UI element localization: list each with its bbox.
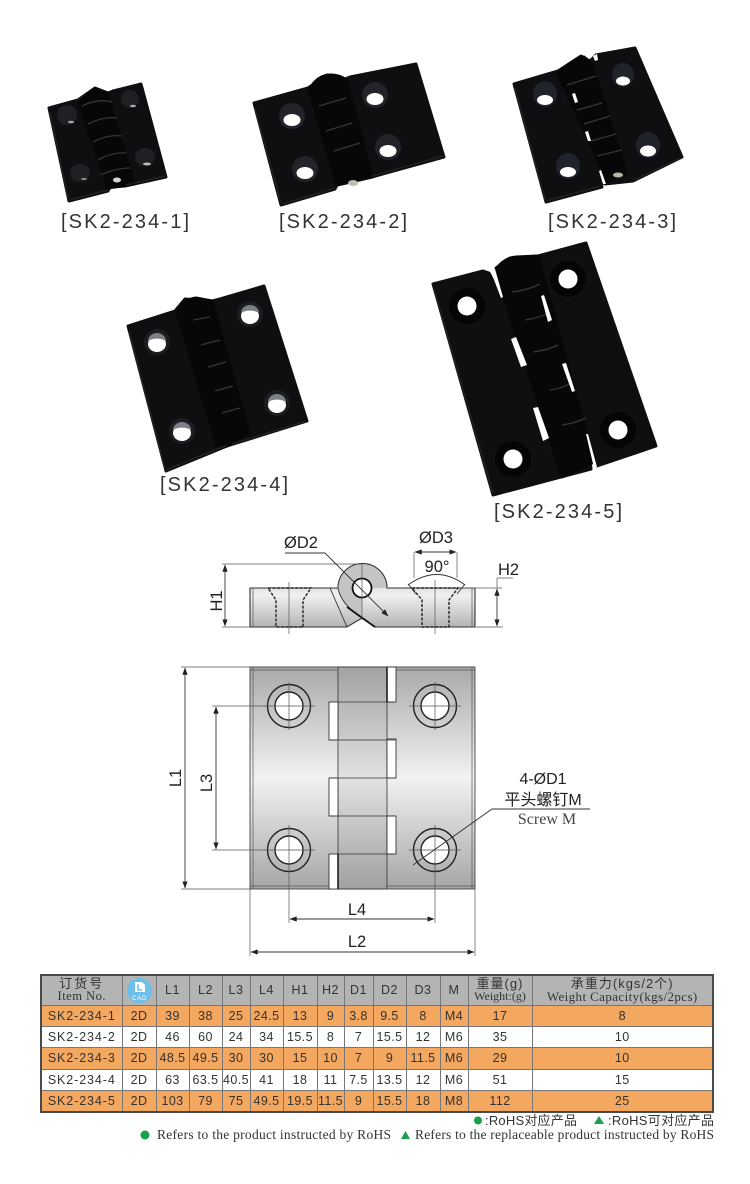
dimension: diameter D2: ØD2 xyxy=(284,534,318,552)
row: SK2-234-1: 39 xyxy=(165,1009,180,1023)
row: SK2-234-1: 9 xyxy=(327,1009,334,1023)
row: SK2-234-2: 7 xyxy=(355,1030,362,1044)
footer note: RoHS legend Chinese xyxy=(474,1113,714,1128)
callout: screw M xyxy=(413,771,590,865)
row: SK2-234-1: 9.5 xyxy=(380,1009,399,1023)
specification table xyxy=(40,974,714,1113)
product photo: SK2-234-4 xyxy=(128,286,307,471)
row: SK2-234-5: 18 xyxy=(416,1094,430,1108)
product photo: SK2-234-3 xyxy=(514,48,682,202)
label: SK2-234-1: [SK2-234-1] xyxy=(61,211,189,233)
table header row: 重量(g) xyxy=(477,976,523,991)
callout: screw M: 4-ØD1 xyxy=(519,771,567,788)
dimension: L3: L3 xyxy=(198,774,216,792)
row: SK2-234-4: 2D xyxy=(131,1073,147,1087)
row: SK2-234-1: 38 xyxy=(198,1009,213,1023)
row: SK2-234-5: 75 xyxy=(229,1094,243,1108)
row: SK2-234-5: 79 xyxy=(198,1094,213,1108)
row: SK2-234-1: 17 xyxy=(493,1009,507,1023)
top view technical drawing xyxy=(167,667,590,956)
row: SK2-234-5: SK2-234-5 xyxy=(48,1094,116,1108)
table header row: L4 xyxy=(259,983,274,997)
row: SK2-234-4 xyxy=(41,1069,713,1091)
row: SK2-234-3: 48.5 xyxy=(160,1051,185,1065)
dimension: 90 degree countersink xyxy=(408,558,465,594)
row: SK2-234-2: 15.5 xyxy=(287,1030,313,1044)
row: SK2-234-3: 29 xyxy=(493,1051,507,1065)
row: SK2-234-4: 18 xyxy=(293,1073,307,1087)
row: SK2-234-5: 19.5 xyxy=(287,1094,313,1108)
row: SK2-234-3: M6 xyxy=(445,1051,463,1065)
row: SK2-234-3: SK2-234-3 xyxy=(48,1051,116,1065)
callout: screw M: 平头螺钉M xyxy=(504,791,582,809)
row: SK2-234-1 xyxy=(41,1005,713,1026)
row: SK2-234-2: 35 xyxy=(493,1030,507,1044)
dimension: L4 xyxy=(289,850,435,923)
hinge side profile xyxy=(250,563,475,634)
footer note: RoHS legend English xyxy=(140,1127,714,1142)
row: SK2-234-5: 9 xyxy=(355,1094,362,1108)
row: SK2-234-4: 7.5 xyxy=(349,1073,368,1087)
table header row: L2 xyxy=(198,983,213,997)
dimension: diameter D2 xyxy=(284,534,388,616)
row: SK2-234-5: 25 xyxy=(615,1094,630,1108)
row: SK2-234-2: 8 xyxy=(327,1030,334,1044)
dimension: H2: H2 xyxy=(498,561,519,579)
dimension: L3 xyxy=(198,706,268,850)
dimension: diameter D3: ØD3 xyxy=(419,529,453,547)
row: SK2-234-5: 11.5 xyxy=(318,1094,343,1108)
row: SK2-234-1: 13 xyxy=(293,1009,307,1023)
row: SK2-234-4: 41 xyxy=(259,1073,274,1087)
row: SK2-234-4: 13.5 xyxy=(377,1073,402,1087)
table header row: Weight Capacity(kgs/2pcs) xyxy=(547,989,698,1004)
mounting holes xyxy=(263,682,461,872)
footer note: RoHS legend Chinese: :RoHS可对应产品 xyxy=(608,1113,714,1128)
product photo: SK2-234-5 xyxy=(433,243,656,495)
table header row: D3 xyxy=(414,983,431,997)
table header row: H2 xyxy=(322,983,339,997)
table header row: L3 xyxy=(229,983,243,997)
row: SK2-234-1: 2D xyxy=(131,1009,147,1023)
row: SK2-234-2: 46 xyxy=(165,1030,180,1044)
row: SK2-234-2: 60 xyxy=(198,1030,213,1044)
table header row: 承重力(kgs/2个) xyxy=(571,976,674,991)
row: SK2-234-5: 2D xyxy=(131,1094,147,1108)
table header row: Item No. xyxy=(58,989,106,1003)
row: SK2-234-5: 15.5 xyxy=(377,1094,402,1108)
row: SK2-234-4: 51 xyxy=(493,1073,507,1087)
dimension: 90 degree countersink: 90° xyxy=(425,558,449,576)
row: SK2-234-1: 25 xyxy=(229,1009,243,1023)
table header row: D2 xyxy=(381,983,398,997)
label: SK2-234-2: [SK2-234-2] xyxy=(279,211,407,233)
row: SK2-234-3: 9 xyxy=(386,1051,393,1065)
row: SK2-234-3: 10 xyxy=(323,1051,338,1065)
label: SK2-234-3: [SK2-234-3] xyxy=(548,211,676,233)
row: SK2-234-2: 15.5 xyxy=(377,1030,402,1044)
row: SK2-234-4: 12 xyxy=(416,1073,430,1087)
row: SK2-234-3: 2D xyxy=(131,1051,147,1065)
table header row: CAD xyxy=(131,995,147,1002)
row: SK2-234-2: M6 xyxy=(445,1030,463,1044)
row: SK2-234-3: 10 xyxy=(615,1051,630,1065)
label: SK2-234-5: [SK2-234-5] xyxy=(494,501,622,523)
dimension: H1: H1 xyxy=(208,590,226,612)
dimension: H2 xyxy=(463,561,519,627)
dimension: H1 xyxy=(208,564,362,627)
row: SK2-234-3 xyxy=(41,1048,713,1069)
table header row: Weight:(g) xyxy=(474,989,526,1003)
row: SK2-234-3: 15 xyxy=(293,1051,307,1065)
row: SK2-234-2: SK2-234-2 xyxy=(48,1030,116,1044)
table header row: H1 xyxy=(292,983,308,997)
row: SK2-234-1: M4 xyxy=(445,1009,463,1023)
row: SK2-234-1: 3.8 xyxy=(349,1009,368,1023)
row: SK2-234-1: 8 xyxy=(619,1009,626,1023)
side view technical drawing xyxy=(208,529,519,634)
product photo: SK2-234-2 xyxy=(254,64,444,205)
dimension: L2: L2 xyxy=(348,933,366,951)
row: SK2-234-3: 7 xyxy=(355,1051,362,1065)
row: SK2-234-5: M8 xyxy=(445,1094,463,1108)
label: SK2-234-4: [SK2-234-4] xyxy=(160,474,288,496)
row: SK2-234-5: 112 xyxy=(489,1094,511,1108)
row: SK2-234-2: 2D xyxy=(131,1030,147,1044)
footer note: RoHS legend English: Refers to the replaceable product instructed by RoHS xyxy=(415,1127,714,1142)
row: SK2-234-3: 30 xyxy=(229,1051,243,1065)
row: SK2-234-4: M6 xyxy=(445,1073,463,1087)
dimension: L2 xyxy=(250,889,475,956)
row: SK2-234-4: 63 xyxy=(165,1073,180,1087)
row: SK2-234-2 xyxy=(41,1026,713,1048)
row: SK2-234-3: 49.5 xyxy=(193,1051,218,1065)
footer note: RoHS legend English: Refers to the product instructed by RoHS xyxy=(157,1127,391,1142)
callout: screw M: Screw M xyxy=(518,811,576,828)
table header row: M xyxy=(449,983,459,997)
table header row xyxy=(41,975,713,1005)
footer note: RoHS legend Chinese: :RoHS对应产品 xyxy=(485,1113,577,1128)
hinge plate xyxy=(250,667,475,889)
dimension: diameter D3 xyxy=(414,529,457,578)
row: SK2-234-2: 10 xyxy=(615,1030,630,1044)
row: SK2-234-1: 24.5 xyxy=(254,1009,279,1023)
row: SK2-234-5 xyxy=(41,1091,713,1112)
row: SK2-234-1: SK2-234-1 xyxy=(48,1009,116,1023)
table header row: L1 xyxy=(165,983,180,997)
dimension: L1: L1 xyxy=(167,769,185,787)
row: SK2-234-2: 12 xyxy=(416,1030,430,1044)
table header row: D1 xyxy=(350,983,367,997)
product photo: SK2-234-1 xyxy=(49,84,166,201)
dimension: L1 xyxy=(167,667,250,889)
row: SK2-234-4: 11 xyxy=(324,1073,337,1087)
row: SK2-234-5: 103 xyxy=(161,1094,184,1108)
row: SK2-234-5: 49.5 xyxy=(254,1094,279,1108)
dimension: L4: L4 xyxy=(348,901,366,919)
row: SK2-234-4: 15 xyxy=(615,1073,630,1087)
row: SK2-234-4: SK2-234-4 xyxy=(48,1073,116,1087)
row: SK2-234-4: 63.5 xyxy=(193,1073,218,1087)
table header row: 订货号 xyxy=(59,976,104,991)
row: SK2-234-3: 11.5 xyxy=(410,1051,436,1065)
row: SK2-234-1: 8 xyxy=(419,1009,427,1023)
row: SK2-234-2: 24 xyxy=(229,1030,243,1044)
row: SK2-234-3: 30 xyxy=(259,1051,274,1065)
row: SK2-234-4: 40.5 xyxy=(223,1073,249,1087)
row: SK2-234-2: 34 xyxy=(259,1030,274,1044)
